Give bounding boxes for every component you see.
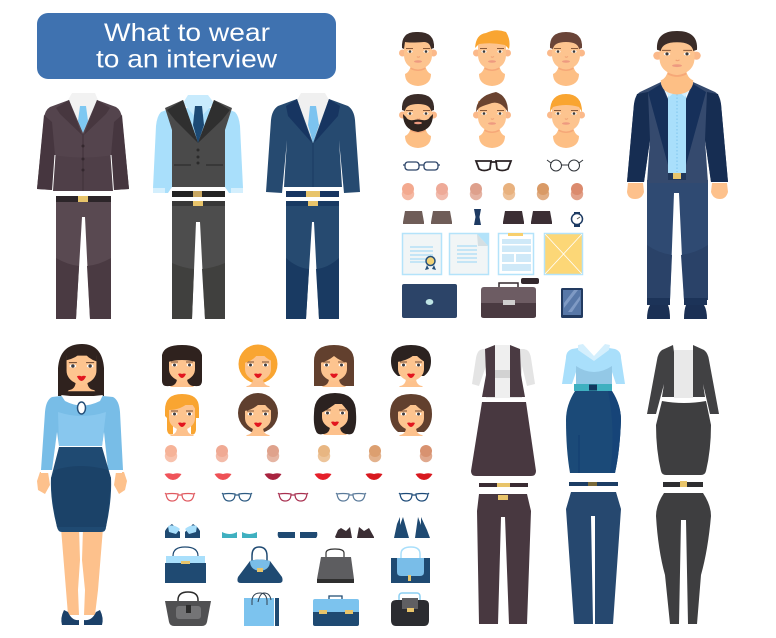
blouse bbox=[472, 345, 535, 398]
head: dark long bob bbox=[162, 345, 202, 387]
bag: blue briefcase bbox=[313, 596, 359, 626]
shirt and collar bbox=[661, 79, 693, 180]
brown shoes bbox=[403, 211, 452, 224]
title text: What to wear bbox=[104, 19, 270, 47]
bow tie bbox=[474, 209, 481, 225]
head: black wavy bob bbox=[314, 393, 356, 435]
teal belt bbox=[574, 384, 612, 391]
trousers bbox=[477, 494, 531, 624]
women's outfit: blue blouse and skirt set bbox=[562, 344, 625, 624]
head bbox=[653, 31, 701, 94]
male head options bbox=[399, 30, 585, 148]
trousers bbox=[566, 492, 621, 624]
belt bbox=[172, 191, 225, 197]
trousers bbox=[286, 201, 339, 319]
head: brown hair bbox=[547, 32, 585, 86]
women's outfit: charcoal jacket and skirt set bbox=[647, 345, 719, 624]
vest bbox=[165, 100, 232, 187]
tablet bbox=[561, 288, 583, 318]
hands bbox=[627, 183, 728, 199]
handbags bbox=[165, 547, 430, 626]
navy flats bbox=[278, 532, 317, 538]
belt bbox=[286, 191, 339, 197]
hands bbox=[37, 472, 127, 494]
dark brown pumps bbox=[335, 527, 374, 538]
trousers and belt bbox=[56, 196, 111, 319]
jacket bbox=[627, 82, 728, 183]
glasses: round wire bbox=[547, 160, 583, 171]
head: bearded bbox=[399, 94, 437, 148]
head: brown bob bbox=[238, 393, 278, 436]
certificate bbox=[402, 234, 442, 274]
head bbox=[67, 348, 96, 391]
navy heels bbox=[394, 517, 430, 538]
male full figure bbox=[627, 31, 728, 319]
jacket bbox=[37, 100, 129, 191]
bag: black with blue handle bbox=[391, 593, 429, 626]
female skin tone swatches bbox=[165, 445, 432, 462]
blouse bbox=[562, 344, 625, 385]
envelope bbox=[544, 234, 582, 274]
men's outfit: brown suit bbox=[37, 93, 129, 319]
dark shoes bbox=[503, 211, 552, 224]
laptop bbox=[402, 284, 457, 318]
legs bbox=[61, 528, 103, 615]
belt bbox=[569, 482, 618, 486]
title text: to an interview bbox=[96, 46, 278, 74]
shirt and tie bbox=[68, 93, 98, 133]
documents bbox=[402, 233, 582, 274]
trousers bbox=[172, 201, 225, 319]
trousers bbox=[647, 180, 708, 305]
male skin tone swatches bbox=[402, 183, 583, 200]
head: straight brown hair bbox=[314, 345, 354, 387]
shirt with sleeves bbox=[153, 95, 243, 193]
bag: rounded navy bbox=[237, 547, 283, 583]
title banner bbox=[37, 13, 336, 79]
male glasses options bbox=[403, 160, 583, 171]
women's outfit: brown vest and skirt set bbox=[471, 345, 536, 624]
blue flats bbox=[165, 524, 200, 538]
document with folded corner bbox=[450, 234, 488, 274]
shoes bbox=[61, 610, 103, 625]
female glasses options bbox=[165, 493, 429, 501]
head: short dark bob bbox=[391, 345, 431, 387]
head: brown quiff bbox=[473, 92, 511, 148]
vest bbox=[482, 345, 525, 397]
watch bbox=[572, 212, 582, 227]
head: orange hair bbox=[547, 94, 585, 148]
head: brown rounded bob bbox=[390, 394, 432, 436]
belt bbox=[663, 481, 703, 487]
jacket bbox=[266, 99, 360, 193]
female full figure bbox=[37, 344, 127, 625]
shirt and tie bbox=[297, 93, 329, 143]
jacket bbox=[647, 345, 719, 414]
hair back bbox=[58, 344, 104, 396]
head: dark hair bbox=[399, 32, 437, 86]
glasses: black thick frame bbox=[476, 161, 511, 170]
clipboard form bbox=[498, 233, 534, 274]
men's outfit: navy suit bbox=[266, 93, 360, 319]
head: blond bob bbox=[238, 344, 278, 387]
head: blond hair bbox=[473, 30, 511, 86]
belt bbox=[479, 483, 528, 487]
shoes bbox=[647, 305, 707, 319]
title text bbox=[96, 19, 278, 74]
lipstick options bbox=[164, 473, 432, 480]
skirt bbox=[566, 391, 621, 473]
men's outfit: grey vest and blue shirt bbox=[153, 95, 243, 319]
trousers bbox=[656, 493, 711, 624]
female shoes bbox=[165, 517, 430, 538]
bag: light blue and navy bbox=[391, 547, 430, 583]
male shoes, bow tie and watch bbox=[403, 209, 582, 227]
female head options bbox=[162, 344, 432, 436]
teal flats bbox=[222, 532, 257, 538]
bag: navy and blue structured bbox=[165, 547, 206, 583]
skirt bbox=[656, 401, 711, 475]
skirt bbox=[471, 402, 536, 476]
bag: grey tote bbox=[317, 549, 354, 583]
bag: blue shopping bag bbox=[244, 593, 279, 626]
briefcase bbox=[481, 278, 539, 318]
head: blond short hair bbox=[165, 394, 199, 436]
bag: grey with clasp bbox=[165, 592, 211, 626]
glasses: navy rectangular bbox=[403, 162, 440, 170]
blouse bbox=[674, 350, 693, 398]
blouse bbox=[41, 395, 123, 473]
skirt bbox=[51, 447, 111, 532]
